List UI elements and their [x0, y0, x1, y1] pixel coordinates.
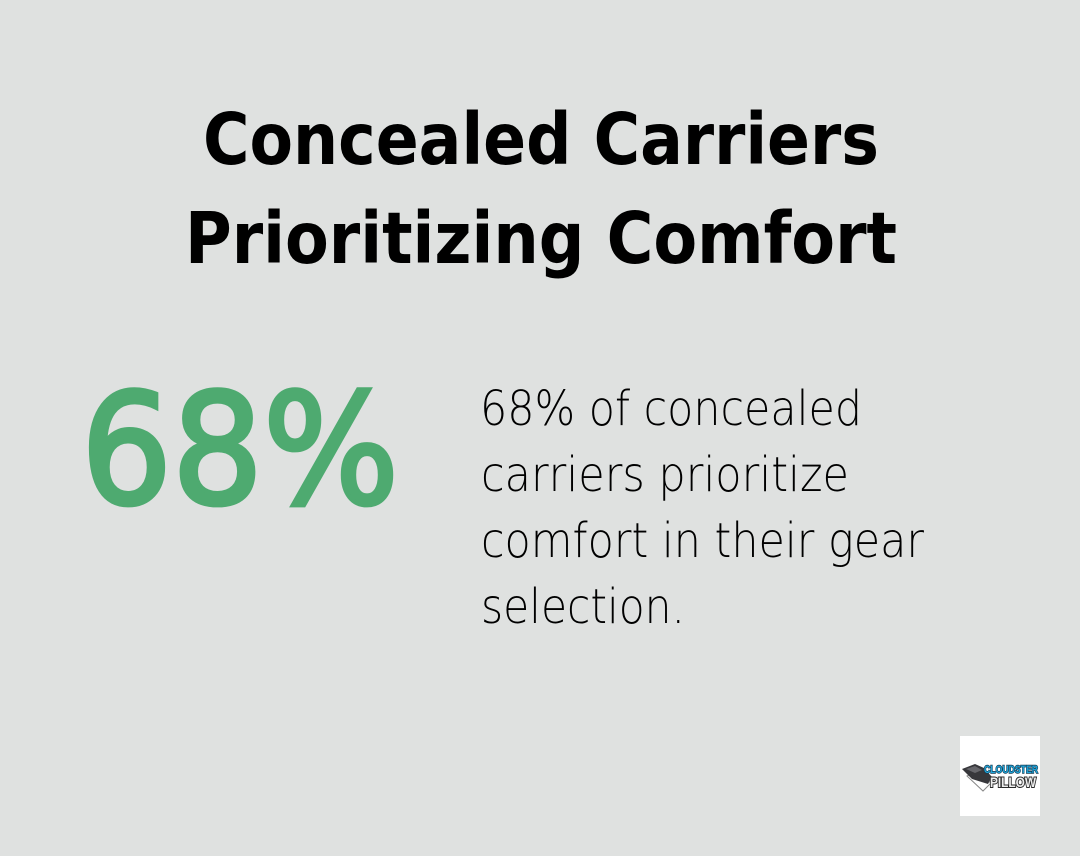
title: [185, 98, 897, 280]
logo wordmark: [984, 764, 1038, 790]
logo wordmark: PILLOW: [990, 774, 1037, 790]
description text: selection.: [481, 579, 685, 635]
logo wordmark: CLOUDSTER: [984, 764, 1038, 776]
big stat: 68%: 68%: [81, 362, 399, 540]
title: Concealed Carriers: [203, 98, 879, 181]
description text: 68% of concealed: [480, 381, 862, 437]
description text: comfort in their gear: [481, 513, 924, 569]
description text: [480, 381, 924, 635]
title: Prioritizing Comfort: [185, 197, 897, 280]
description text: carriers prioritize: [481, 447, 849, 503]
logo: Cloudster Pillow: [960, 736, 1040, 816]
icon: pillow: [962, 764, 992, 791]
